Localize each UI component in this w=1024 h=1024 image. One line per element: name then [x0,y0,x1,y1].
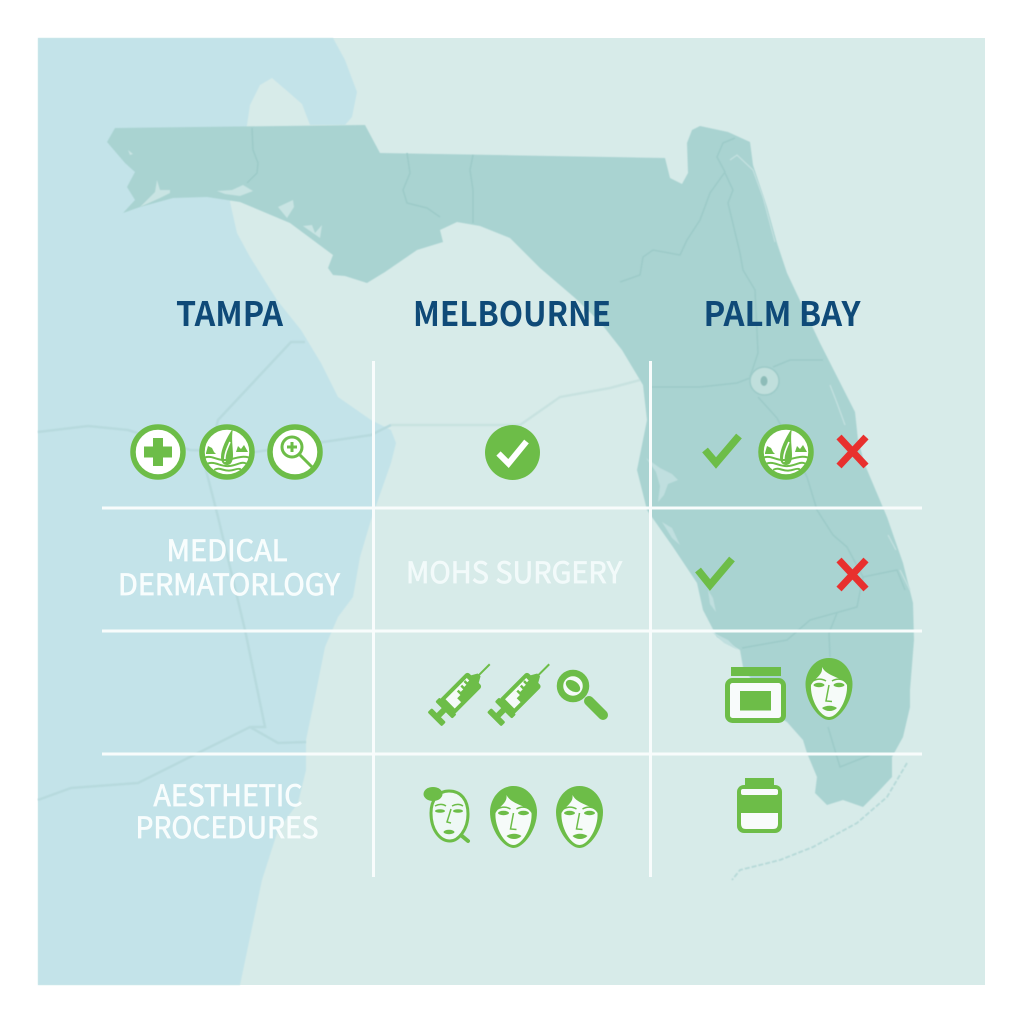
grid lines [102,361,922,877]
florida keys [732,763,907,880]
icon: face two [490,786,537,848]
label: mohs surgery: MOHS SURGERY [406,550,623,592]
label: medical dermatology [118,528,341,604]
heading: Melbourne: MELBOURNE [413,287,611,336]
label: aesthetic procedures: PROCEDURES [136,805,318,847]
Florida state map [107,125,914,807]
icon: magnifier with plus [270,427,320,477]
label: aesthetic procedures: AESTHETIC [154,773,302,815]
icon: syringe two [486,656,558,728]
background roads [38,342,640,800]
label: medical dermatology: DERMATORLOGY [118,562,341,604]
icon: skin layers circle, Palm Bay [761,427,811,477]
icon: check circle, Melbourne [485,425,540,480]
icon: magnifier on skin [560,673,603,715]
icon: green check, Palm Bay row 1 [705,436,739,463]
icon: face three [556,786,603,848]
icon: medical cross [133,427,183,477]
icon: skin layers circle, Tampa [202,427,252,477]
icon: face, Palm Bay [806,658,852,720]
east coast lagoon [730,155,910,590]
icon: syringe one [426,656,498,728]
panhandle bays [128,150,322,238]
icon: green check, Palm Bay row 2 [698,559,732,585]
icon: red cross, row 2 [839,560,866,589]
background: gulf water [38,38,396,985]
icon: jar wide [728,667,784,720]
tampa and charlotte bays [646,458,738,650]
icon: red cross, row 1 [839,437,866,466]
heading: Tampa: TAMPA [176,287,283,336]
icon: jar tall [737,778,782,833]
icon: face with bun [424,787,468,841]
label: aesthetic procedures [136,773,318,847]
lake okeechobee [750,367,779,395]
heading: Palm Bay: PALM BAY [704,287,861,336]
label: medical dermatology: MEDICAL [166,528,288,570]
county lines [247,128,905,767]
